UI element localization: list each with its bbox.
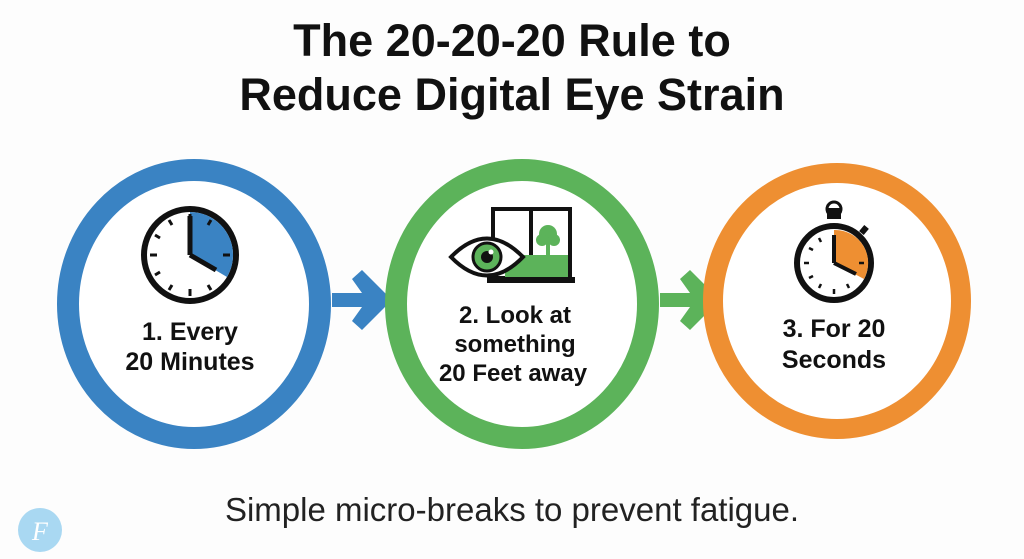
text: 2. Look at something 20 Feet away: 2. Look at xyxy=(459,302,571,329)
step 2: look 20 feet away xyxy=(396,170,648,438)
icon: eye and window xyxy=(451,209,575,283)
step 3: for 20 seconds xyxy=(713,173,961,429)
icon: logo xyxy=(18,508,62,552)
arrow: blue xyxy=(332,270,392,330)
text: 1. Every 20 Minutes: 1. Every xyxy=(142,318,238,346)
arrow: green xyxy=(660,270,720,330)
icon: logo: F xyxy=(31,517,49,546)
step 1: every 20 minutes xyxy=(68,170,320,438)
icon: stopwatch xyxy=(797,202,871,300)
step 1: every 20 minutes: 20 Minutes xyxy=(125,348,255,376)
step 2: look 20 feet away: 20 Feet away xyxy=(439,360,588,387)
title: The 20-20-20 Rule to xyxy=(293,15,731,66)
step 2: look 20 feet away: something xyxy=(454,331,576,358)
step 3: for 20 seconds: Seconds xyxy=(782,346,886,374)
icon: clock xyxy=(144,209,236,301)
text: 3. For 20 Seconds: 3. For 20 xyxy=(783,315,885,343)
subtitle: Simple micro-breaks to prevent fatigue. xyxy=(225,491,799,528)
title xyxy=(239,15,785,120)
title: Reduce Digital Eye Strain xyxy=(239,69,785,120)
